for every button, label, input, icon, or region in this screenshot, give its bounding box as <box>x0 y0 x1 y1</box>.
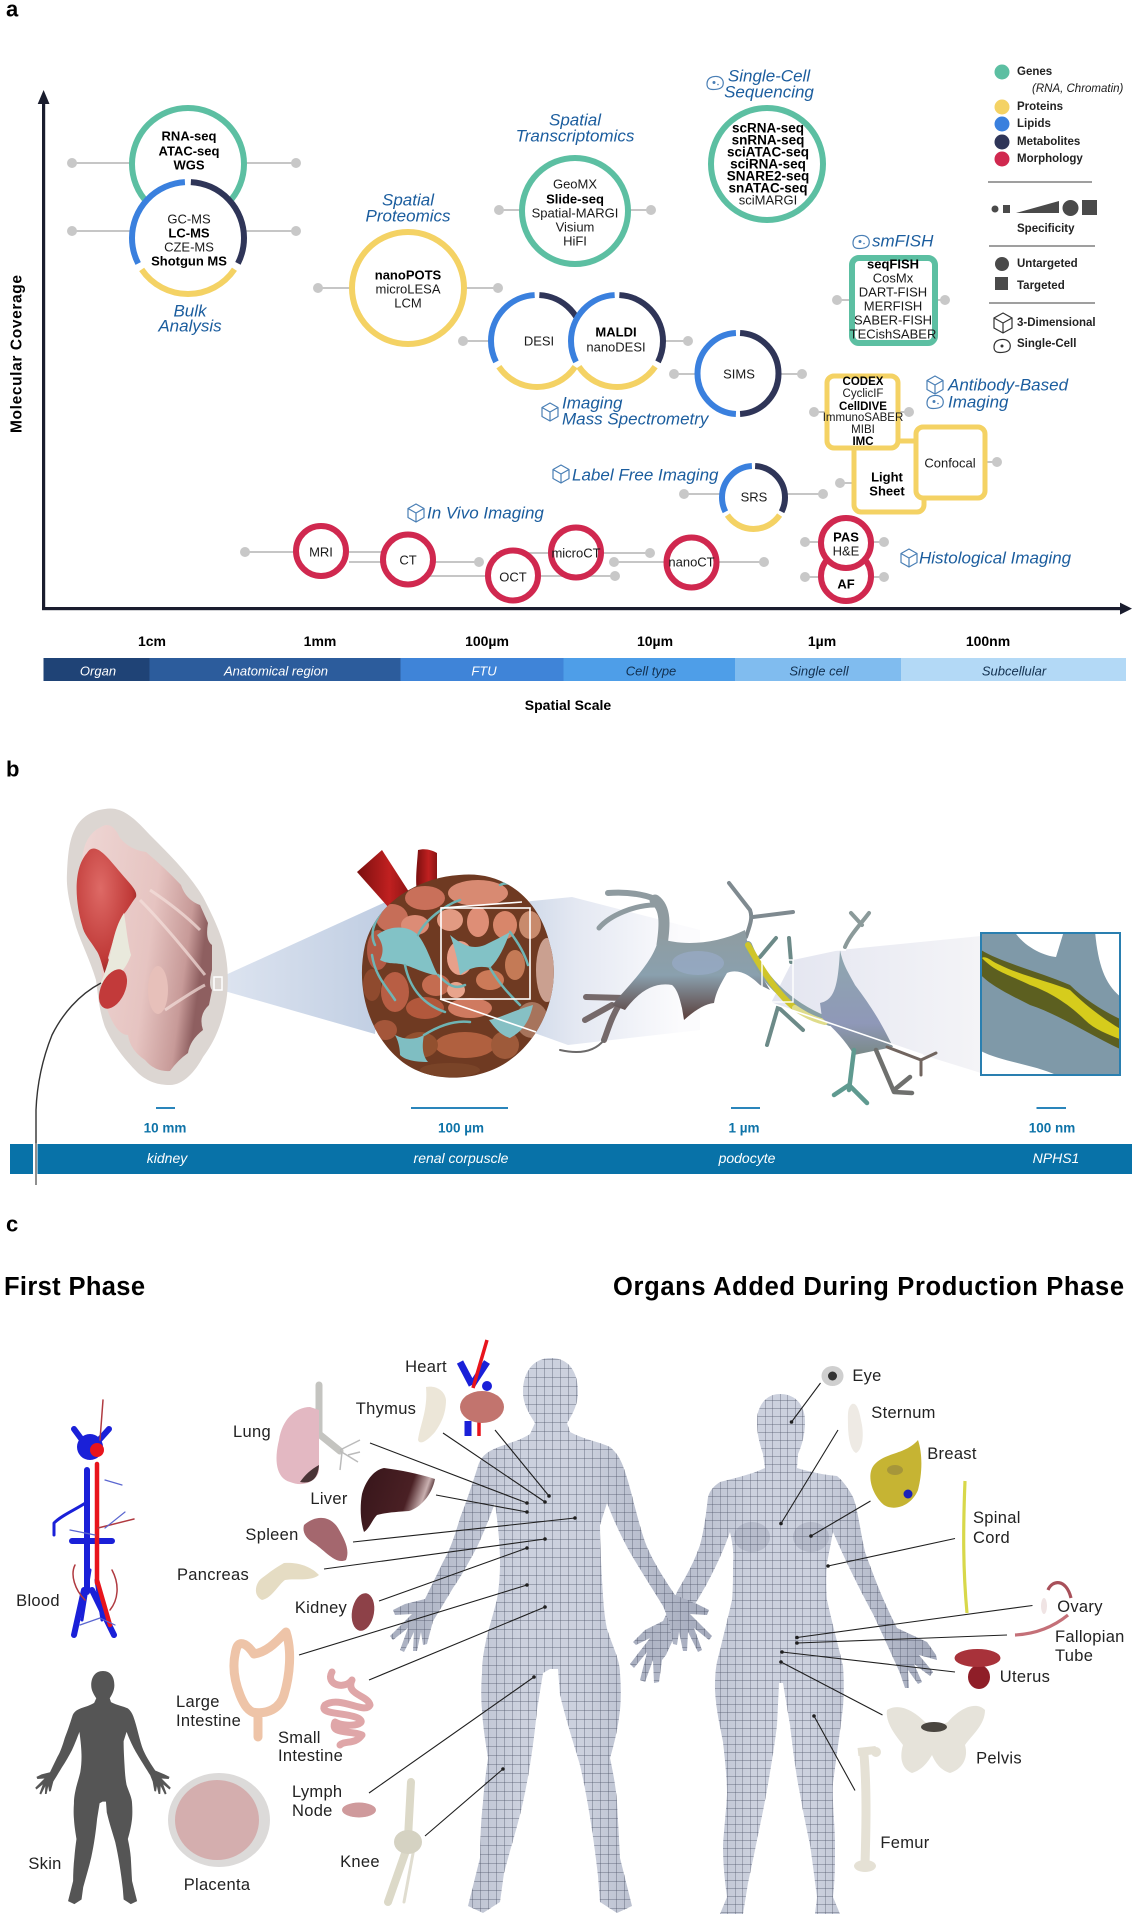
organ: large intestine <box>234 1632 290 1737</box>
scale bar: 100 nm <box>1029 1107 1075 1136</box>
structure name bar <box>10 1130 1132 1185</box>
group: antibody-based imaging and microscopy boxes: MIBI <box>851 424 875 436</box>
scale bar: 1 µm <box>728 1107 760 1136</box>
spatial scale colour bar: Single cell <box>789 664 850 678</box>
panel b: kidney zoom series <box>6 756 1132 1185</box>
organ label: Liver: Liver <box>310 1490 348 1508</box>
organ: lung <box>277 1385 360 1484</box>
illustration: podocyte <box>560 883 936 1103</box>
organ label: Fallopian Tube <box>1055 1628 1125 1665</box>
group: antibody-based imaging and microscopy boxes: Confocal <box>924 456 976 470</box>
group: smFISH: seqFISH <box>867 256 919 272</box>
group: imaging mass spectrometry: DESI <box>524 334 554 348</box>
y axis title: Molecular Coverage <box>8 275 26 433</box>
group: spatial proteomics: microLESA <box>375 282 441 296</box>
organ: femur <box>854 1747 881 1872</box>
group: spatial proteomics: nanoPOTS <box>375 268 442 282</box>
organ label: Pelvis: Pelvis <box>976 1750 1022 1768</box>
group: in vivo imaging: nanoCT <box>668 554 715 570</box>
organ label: Femur: Femur <box>880 1834 930 1852</box>
group: bulk analysis: GC-MS <box>167 212 211 226</box>
group: spatial transcriptomics: GeoMX <box>553 176 597 192</box>
group: smFISH: DART-FISH <box>859 284 927 300</box>
group: spatial transcriptomics: Visium <box>556 220 594 234</box>
organ: liver <box>361 1468 435 1532</box>
group: label free imaging: SRS <box>741 490 768 504</box>
group: spatial proteomics: LCM <box>394 296 422 310</box>
group: histological imaging: AF <box>837 576 855 592</box>
legend: Lipids <box>1017 118 1051 130</box>
group: spatial transcriptomics <box>494 110 656 264</box>
legend: (RNA, Chromatin) <box>1032 83 1124 95</box>
group: imaging mass spectrometry: Imaging <box>562 394 623 412</box>
group: in vivo imaging: OCT <box>499 570 527 584</box>
panel a: molecular coverage versus spatial scale chart <box>6 0 1132 713</box>
group: spatial transcriptomics: Spatial-MARGI <box>532 206 618 220</box>
scale bar: 10 mm <box>144 1107 186 1136</box>
organ: kidney <box>349 1591 377 1633</box>
group: single-cell sequencing: snRNA-seq <box>732 132 804 148</box>
group: single-cell sequencing <box>707 66 823 220</box>
leader lines to organs on female body <box>779 1383 1032 1790</box>
organ label: Skin: Skin <box>28 1855 62 1873</box>
group: bulk analysis: CZE-MS <box>164 240 214 254</box>
group: bulk analysis: Shotgun MS <box>151 254 227 268</box>
organ label: Spinal Cord: Cord <box>973 1529 1010 1547</box>
group: spatial transcriptomics: Slide-seq <box>546 192 604 206</box>
group: single-cell sequencing: snATAC-seq <box>728 180 808 196</box>
group: histological imaging <box>800 518 1072 601</box>
group: antibody-based imaging and microscopy boxes <box>809 376 1069 512</box>
illustration: renal corpuscle <box>357 849 554 1078</box>
scale bar: 100 µm: 100 µm <box>438 1120 484 1136</box>
organ label: Ovary: Ovary <box>1057 1598 1103 1616</box>
group: histological imaging: Histological Imaging <box>919 548 1072 568</box>
group: histological imaging: H&E <box>833 544 860 558</box>
panel letter c: c <box>6 1212 18 1236</box>
illustration: NPHS1 zoom inset <box>979 931 1122 1078</box>
spatial scale colour bar: Subcellular <box>982 664 1047 678</box>
structure name bar: renal corpuscle <box>414 1150 509 1166</box>
spatial scale tick labels: 1cm <box>138 633 166 649</box>
legend: Genes <box>1017 66 1052 78</box>
group: spatial proteomics: Spatial <box>382 190 435 210</box>
legend: Specificity <box>1017 223 1075 235</box>
organ label: Uterus: Uterus <box>1000 1668 1050 1686</box>
group: smFISH: CosMx <box>873 270 914 286</box>
group: label free imaging <box>553 465 828 529</box>
organ label: Placenta: Placenta <box>184 1876 251 1894</box>
scale bar: 1 µm: 1 µm <box>728 1120 760 1136</box>
spatial scale tick labels: 1µm <box>808 633 836 649</box>
group: bulk analysis: RNA-seq <box>162 128 217 144</box>
organ: fallopian tube <box>1015 1615 1068 1635</box>
heading: organs added during production phase: Organs Added During Production Phase <box>613 1273 1124 1301</box>
organ: heart <box>460 1340 504 1436</box>
organ label: Lymph Node: Node <box>292 1802 333 1820</box>
group: bulk analysis: LC-MS <box>168 226 210 240</box>
organ: pelvis <box>887 1706 985 1773</box>
group: SIMS <box>669 333 807 414</box>
scale bar: 100 nm: 100 nm <box>1029 1120 1075 1136</box>
group: label free imaging: Label Free Imaging <box>572 466 719 484</box>
legend: Single-Cell <box>1017 338 1076 350</box>
organ label: Blood: Blood <box>16 1592 60 1610</box>
spatial scale tick labels: 1mm <box>304 633 336 649</box>
illustration: female mesh body <box>630 1394 937 1914</box>
group: smFISH <box>832 232 950 343</box>
legend: 3-Dimensional <box>1017 317 1096 329</box>
group: imaging mass spectrometry: nanoDESI <box>586 340 646 354</box>
organ label: Pancreas: Pancreas <box>177 1566 249 1584</box>
organ label: Large Intestine: Intestine <box>176 1712 241 1730</box>
group: antibody-based imaging and microscopy boxes: CellDIVE <box>839 401 887 413</box>
organ: small intestine <box>324 1672 370 1745</box>
organ label: Spinal Cord: Spinal <box>973 1509 1021 1527</box>
leader lines to organs on male body <box>299 1430 577 1836</box>
group: bulk analysis <box>67 108 301 336</box>
legend: Morphology <box>1017 153 1083 165</box>
group: single-cell sequencing: SNARE2-seq <box>727 168 809 184</box>
organ: knee <box>388 1782 422 1902</box>
organ label: Fallopian Tube: Fallopian <box>1055 1628 1125 1646</box>
group: bulk analysis: ATAC-seq <box>159 144 220 158</box>
group: single-cell sequencing: sciRNA-seq <box>730 156 806 172</box>
organ label: Small Intestine <box>278 1729 343 1765</box>
group: spatial transcriptomics: HiFI <box>563 234 587 248</box>
organ: pancreas <box>256 1563 319 1600</box>
panel letter b: b <box>6 756 19 782</box>
spatial scale tick labels: 10µm <box>637 633 673 649</box>
legend: Targeted <box>1017 280 1065 292</box>
group: smFISH: SABER-FISH <box>854 312 932 328</box>
organ label: Spleen: Spleen <box>245 1526 299 1544</box>
group: single-cell sequencing: Sequencing <box>724 82 814 102</box>
organ label: Spinal Cord <box>973 1509 1021 1547</box>
organ label: Breast: Breast <box>927 1445 977 1463</box>
organ label: Lung: Lung <box>233 1423 271 1441</box>
group: spatial proteomics: Proteomics <box>365 206 451 226</box>
group: in vivo imaging: CT <box>399 552 417 568</box>
structure name bar: podocyte <box>718 1150 776 1166</box>
organ: blood vasculature <box>54 1400 134 1635</box>
group: imaging mass spectrometry: Mass Spectrometry <box>562 410 710 428</box>
structure name bar: kidney <box>147 1150 188 1166</box>
scale bar: 10 mm: 10 mm <box>144 1120 186 1136</box>
group: imaging mass spectrometry: MALDI <box>595 324 637 340</box>
group: antibody-based imaging and microscopy boxes: IMC <box>852 436 874 448</box>
group: antibody-based imaging and microscopy boxes: Sheet <box>869 484 905 498</box>
group: imaging mass spectrometry <box>458 295 710 428</box>
zoom cone: podocyte to NPHS1 <box>771 936 981 1073</box>
organ: ovary <box>1041 1583 1071 1614</box>
legend: Untargeted <box>1017 258 1078 270</box>
spatial scale colour bar: Organ <box>80 664 116 678</box>
group: antibody-based imaging and microscopy boxes: CyclicIF <box>843 388 883 400</box>
spatial scale colour bar: Anatomical region <box>223 664 328 678</box>
group: single-cell sequencing: scRNA-seq <box>732 120 804 136</box>
organ label: Sternum: Sternum <box>871 1404 936 1422</box>
group: antibody-based imaging and microscopy boxes: Antibody-Based <box>947 376 1069 394</box>
group: in vivo imaging: MRI <box>309 544 333 560</box>
group: single-cell sequencing: sciATAC-seq <box>727 144 809 160</box>
spatial scale colour bar: FTU <box>471 664 497 678</box>
group: in vivo imaging <box>240 504 769 600</box>
group: antibody-based imaging and microscopy boxes: CODEX <box>843 376 884 388</box>
organ label: Kidney: Kidney <box>295 1599 348 1617</box>
y axis arrow <box>38 90 50 609</box>
spatial scale colour bar: Cell type <box>626 664 676 678</box>
organ: breast <box>870 1440 921 1508</box>
organ: uterus <box>954 1649 1000 1689</box>
spatial scale tick labels: 100µm <box>465 633 509 649</box>
organ label: Eye: Eye <box>852 1367 882 1385</box>
group: single-cell sequencing: sciMARGI <box>739 192 797 208</box>
organ: spleen <box>303 1518 347 1561</box>
group: bulk analysis: Analysis <box>157 316 222 336</box>
scale bar: 100 µm <box>411 1107 508 1136</box>
organ label: Fallopian Tube: Tube <box>1055 1647 1093 1665</box>
illustration: kidney <box>36 808 228 1144</box>
group: antibody-based imaging and microscopy boxes: Imaging <box>948 392 1009 412</box>
legend: Proteins <box>1017 101 1063 113</box>
organ label: Large Intestine: Large <box>176 1693 220 1711</box>
x axis arrow <box>42 603 1132 615</box>
organ label: Lymph Node: Lymph <box>292 1783 342 1801</box>
organ: placenta <box>168 1773 270 1867</box>
organ label: Thymus: Thymus <box>356 1400 416 1418</box>
group: in vivo imaging: In Vivo Imaging <box>427 504 544 522</box>
organ label: Knee: Knee <box>340 1853 380 1871</box>
group: bulk analysis: Bulk <box>173 302 208 320</box>
organ label: Small Intestine: Small <box>278 1729 321 1747</box>
group: antibody-based imaging and microscopy boxes: Light <box>871 470 904 484</box>
spatial scale tick labels <box>138 633 1010 649</box>
group: spatial transcriptomics: Spatial <box>549 110 602 130</box>
group: SIMS: SIMS <box>723 366 755 382</box>
organ: eye <box>822 1366 844 1386</box>
group: antibody-based imaging and microscopy boxes: ImmunoSABER <box>823 412 903 424</box>
organ label: Small Intestine: Intestine <box>278 1747 343 1765</box>
panel c: human reference atlas organs <box>4 1212 1125 1914</box>
organ label: Heart: Heart <box>405 1358 447 1376</box>
group: spatial proteomics <box>313 190 503 344</box>
legend <box>988 64 1124 352</box>
legend: Metabolites <box>1017 136 1080 148</box>
group: in vivo imaging: microCT <box>551 546 601 560</box>
group: histological imaging: PAS <box>833 530 859 544</box>
spatial scale tick labels: 100nm <box>966 633 1010 649</box>
group: smFISH: TECishSABER <box>850 326 936 342</box>
organ: spinal cord <box>964 1481 967 1613</box>
organ: skin body <box>35 1671 171 1904</box>
group: single-cell sequencing: Single-Cell <box>728 66 811 86</box>
organ: sternum <box>848 1404 863 1453</box>
group: bulk analysis: WGS <box>173 158 205 172</box>
group: smFISH: smFISH <box>872 232 934 250</box>
zoom cone: renal corpuscle to podocyte <box>440 897 700 1045</box>
group: smFISH: MERFISH <box>864 298 922 314</box>
zoom cone: kidney to renal corpuscle <box>221 900 390 1034</box>
organ label: Lymph Node <box>292 1783 342 1820</box>
heading: first phase: First Phase <box>4 1273 145 1301</box>
x axis title: Spatial Scale <box>525 697 611 713</box>
organ: thymus <box>418 1387 446 1442</box>
structure name bar: NPHS1 <box>1033 1150 1079 1166</box>
illustration: male mesh body <box>390 1358 712 1913</box>
kidney zoom box <box>214 977 222 990</box>
organ: lymph node <box>342 1802 376 1818</box>
organ label: Large Intestine <box>176 1693 241 1730</box>
group: spatial transcriptomics: Transcriptomics <box>516 126 635 146</box>
spatial scale colour bar <box>44 658 1126 681</box>
